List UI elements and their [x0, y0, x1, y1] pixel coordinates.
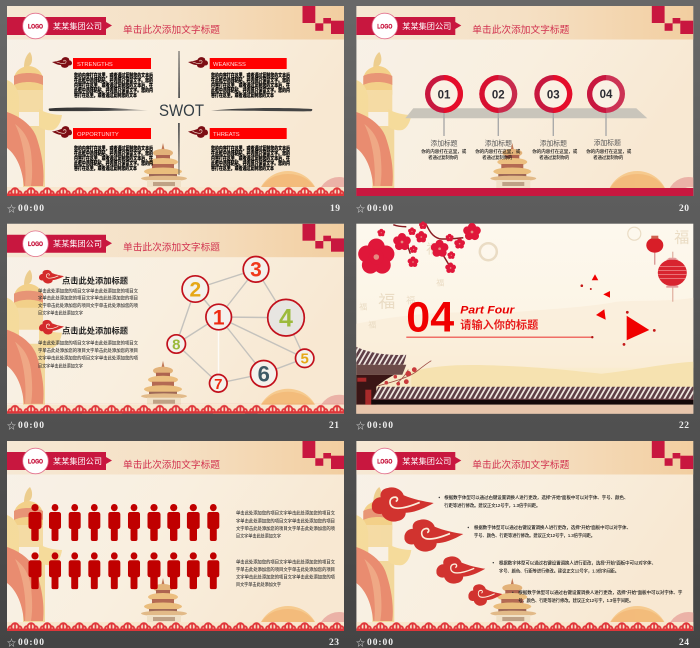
slide 21 header ribbon: [7, 224, 344, 256]
cloud 2: [404, 519, 463, 552]
threats block: THREATS: [213, 132, 240, 138]
step 02: [475, 75, 521, 161]
step 04: 者通过复制你的: [593, 154, 624, 161]
text block upper: 字单击此处添加您的项目文字单击此处添加您的项目: [236, 518, 335, 524]
footer row 1: 20: [679, 204, 689, 214]
opportunity block: 内容打在这里，或者通过复制您的文本后，在: [74, 155, 153, 162]
slide 24 background art: [356, 441, 700, 648]
step 04: [586, 75, 632, 161]
step 03: 你的内容打在这里，或: [532, 148, 578, 155]
step 02: 者通过复制你的: [482, 154, 513, 161]
step 01: 者通过复制你的: [428, 154, 459, 161]
bullet text 1: 行距等进行修改。建议正文12号字，1.3倍字间距。: [444, 502, 540, 509]
slide 20 company name: 某某集团公司: [402, 21, 451, 31]
cloud 1: [372, 487, 434, 522]
bullet text 1: [439, 494, 628, 509]
footer row 3: [7, 638, 689, 648]
footer row 3: ☆: [356, 638, 365, 648]
threats block: 此框中选择粘贴，并选择只保留文字。您的内: [211, 160, 290, 167]
section title: 请输入你的标题: [460, 318, 538, 332]
slide 23 company name: 某某集团公司: [53, 456, 102, 466]
strengths block: 您的内容打在这里，或者通过复制您的文本后: [74, 72, 153, 79]
node 1: [206, 304, 232, 330]
decorative border: [7, 621, 344, 631]
slide 23 background art: [7, 441, 360, 648]
step 03: 者通过复制你的: [539, 154, 570, 161]
decorative border: [7, 186, 344, 196]
slide 20 background art: [356, 6, 700, 233]
weakness block: 此框中选择粘贴，并选择只保留文字。您的内: [211, 87, 290, 94]
pale calligraphy motifs: 福: [359, 303, 367, 312]
step 04: 添加标题: [594, 138, 621, 147]
node 5: 5: [301, 351, 309, 368]
step 02: 添加标题: [485, 138, 512, 148]
slide 19 header ribbon: [7, 6, 344, 39]
bullet text 4: [512, 589, 683, 604]
node 5: [296, 349, 314, 368]
footer row 2: [7, 421, 689, 431]
text block lower: 目文字单击此处添加文字: [236, 581, 281, 588]
triangles: [580, 274, 656, 346]
footer row 1: [7, 204, 689, 214]
slide 21 background art: [7, 224, 360, 451]
step 01: [421, 75, 467, 161]
footer row 3: 24: [679, 638, 689, 648]
decorative border: [7, 404, 344, 414]
roof and pavilion: [356, 347, 693, 414]
cloud 3: [436, 556, 485, 584]
people icon row 1: [28, 504, 219, 541]
step 04: 04: [600, 89, 613, 101]
panel: slide 19 SWOT: [7, 6, 360, 233]
pale calligraphy motifs: 福: [368, 321, 376, 330]
panel: slide 20 timeline: [356, 6, 700, 233]
text block upper: 目文字单击此处添加文字: [236, 532, 281, 540]
grey band: [405, 108, 647, 118]
text block lower: 字单击此处添加您的项目文字单击此处添加您的项目: [236, 566, 335, 573]
step 02: 你的内容打在这里，或: [475, 148, 521, 155]
bottom bar: [356, 188, 693, 196]
strengths block: 在此框中选择粘贴，并选择只保留文字。您的: [74, 77, 153, 84]
slide 19 title: 单击此次添加文字标题: [123, 24, 220, 36]
pale calligraphy motifs: 福: [436, 279, 444, 288]
pale calligraphy motifs: 福: [378, 293, 395, 312]
Part Four: Part Four: [460, 305, 515, 317]
threats block: [188, 126, 290, 172]
slide 22 background: [356, 224, 693, 414]
footer row 1: 19: [330, 204, 340, 214]
threats block: 内容打在这里，或者通过复制您的文本后，在: [211, 155, 290, 162]
panel: slide 21 network: [7, 224, 360, 451]
text block 2: 单击此处添加您的项目文字单击此处添加您的项目文: [38, 340, 138, 347]
cloud 4: [468, 584, 502, 606]
footer row 1: ☆: [7, 204, 16, 214]
ink cross: [49, 51, 312, 175]
step 03: 添加标题: [540, 138, 567, 148]
footer row 1: 00:00: [367, 204, 393, 214]
panel: slide 24 clouds: [356, 441, 700, 648]
slide 24 company name: 某某集团公司: [402, 456, 451, 466]
lanterns: [646, 236, 687, 302]
strengths block: STRENGTHS: [77, 62, 113, 68]
text block 2: 点击此处添加标题: [62, 326, 128, 336]
slide 21 title: 单击此次添加文字标题: [123, 242, 220, 254]
underline: [406, 336, 594, 338]
text block 1: 点击此处添加标题: [62, 276, 128, 286]
strengths block: 此框中选择粘贴，并选择只保留文字。您的内: [74, 87, 153, 94]
node 4: 4: [279, 305, 293, 333]
decorative border: [356, 621, 693, 631]
people icon row 2: [28, 552, 219, 589]
text block upper: 文字单击此处添加您的项目文字单击此处添加您的项: [236, 525, 335, 532]
bullet text 1: 根据数字体型可以通过右键设置调换人进行更改，选择“开始”面板中可以对字体、字号、颜色、: [444, 494, 628, 501]
opportunity block: 容打在这里，或者通过复制您的文本: [74, 165, 137, 172]
footer row 1: ☆: [356, 204, 365, 214]
text block upper: 单击此处添加您的项目文字单击此处添加您的项目文: [236, 510, 335, 516]
plum blossom branch: [358, 221, 481, 274]
slide 24 title: 单击此次添加文字标题: [472, 459, 570, 471]
footer row 3: ☆: [7, 638, 16, 648]
threats block: 在此框中选择粘贴，并选择只保留文字。您的: [211, 150, 290, 157]
strengths block: 内容打在这里，或者通过复制您的文本后，在: [74, 82, 153, 89]
node 4: [268, 299, 304, 336]
weakness block: 容打在这里，或者通过复制您的文本: [211, 92, 274, 99]
step 03: 03: [547, 90, 560, 102]
step 01: 你的内容打在这里，或: [421, 148, 467, 155]
footer row 2: ☆: [7, 421, 16, 431]
slide 20 header ribbon: [356, 6, 693, 39]
footer row 2: 21: [329, 421, 339, 431]
bullet text 2: 根据数字体型可以通过右键设置调换人进行更改，选择“开始”面板中可以对字体、: [474, 524, 631, 531]
slide 24 header ribbon: [356, 441, 693, 474]
section number 04: 04: [406, 294, 454, 342]
opportunity block: 此框中选择粘贴，并选择只保留文字。您的内: [74, 160, 153, 167]
strengths block: [52, 57, 153, 99]
footer row 3: 23: [329, 638, 339, 648]
weakness block: 在此框中选择粘贴，并选择只保留文字。您的: [211, 77, 290, 84]
SWOT heading: SWOT: [159, 101, 204, 120]
slide 19 background art: [7, 6, 360, 233]
bullet text 3: 字号、颜色、行距等进行修改。建议正文12号字，1.3倍字间距。: [499, 568, 619, 574]
weakness block: 您的内容打在这里，或者通过复制您的文本后: [211, 72, 290, 79]
panel: slide 22 section cover: [356, 221, 693, 414]
footer row 2: 00:00: [18, 421, 44, 431]
pale calligraphy motifs: [359, 227, 689, 330]
bullet text 3: 根据数字体型可以通过右键设置调换人进行更改，选择“开始”面板中可以对字体、: [499, 560, 656, 566]
text block 1: 文字单击此处添加您的项目文字单击此处添加您的项: [38, 302, 138, 309]
step 03: [532, 75, 578, 161]
text block 1: [38, 270, 138, 317]
footer row 2: 00:00: [367, 421, 393, 431]
bullet text 4: 号、颜色、行距等进行修改。建议正文12号字，1.3倍字间距。: [518, 597, 633, 604]
pale calligraphy motifs: 福: [406, 295, 415, 306]
node 7: [210, 374, 227, 393]
text block 2: 目文字单击此处添加文字: [38, 363, 83, 370]
pale calligraphy motifs: 福: [674, 230, 689, 247]
weakness block: [188, 57, 290, 99]
opportunity block: [52, 126, 153, 172]
text block lower: 单击此处添加您的项目文字单击此处添加您的项目文: [236, 558, 335, 566]
step 01: 添加标题: [430, 138, 458, 148]
pale mountains: [356, 298, 693, 390]
text block 1: 单击此处添加您的项目文字单击此处添加您的项目文: [38, 288, 138, 295]
bullet text 2: [468, 524, 631, 539]
network diagram: [167, 256, 314, 393]
threats block: 容打在这里，或者通过复制您的文本: [211, 165, 274, 172]
text block 2: 文字单击此处添加您的项目文字单击此处添加您的项: [38, 355, 138, 362]
node 1: 1: [213, 306, 225, 330]
opportunity block: OPPORTUNITY: [77, 132, 119, 138]
pale calligraphy motifs: 福: [426, 242, 439, 257]
weakness block: WEAKNESS: [213, 62, 246, 68]
text block lower: [236, 558, 335, 588]
node 7: 7: [214, 376, 222, 393]
footer row 3: 00:00: [367, 638, 393, 648]
node 8: [167, 335, 186, 354]
text block 2: [38, 320, 138, 370]
footer row 2: ☆: [356, 421, 365, 431]
node 2: [182, 276, 208, 302]
slide 23 header ribbon: [7, 441, 344, 474]
node 6: [251, 360, 277, 387]
text block 2: 字单击此处添加您的项目文字单击此处添加您的项目: [38, 347, 138, 354]
slide 23 title: 单击此次添加文字标题: [123, 459, 220, 471]
text block 1: 字单击此处添加您的项目文字单击此处添加您的项目: [38, 295, 138, 302]
node 3: [243, 256, 269, 282]
bullet text 2: 字号、颜色、行距等进行修改。建议正文12号字，1.3倍字间距。: [474, 532, 595, 539]
node 3: 3: [250, 259, 262, 282]
footer row 3: 00:00: [18, 638, 44, 648]
slide 21 company name: 某某集团公司: [53, 239, 102, 249]
node 2: 2: [189, 278, 201, 302]
bullet text 3: [493, 560, 656, 574]
weakness block: 内容打在这里，或者通过复制您的文本后，在: [211, 82, 290, 89]
opportunity block: 在此框中选择粘贴，并选择只保留文字。您的: [74, 150, 153, 157]
opportunity block: 您的内容打在这里，或者通过复制您的文本后: [74, 145, 153, 152]
footer row 1: 00:00: [18, 204, 44, 214]
strengths block: 容打在这里，或者通过复制您的文本: [74, 92, 137, 99]
footer row 2: 22: [679, 421, 689, 431]
step 02: 02: [492, 90, 505, 102]
slide 20 title: 单击此次添加文字标题: [472, 24, 570, 36]
text block lower: 文字单击此处添加您的项目文字单击此处添加您的项: [236, 574, 335, 580]
threats block: 您的内容打在这里，或者通过复制您的文本后: [211, 145, 290, 152]
node 8: 8: [172, 336, 180, 354]
step 04: 你的内容打在这里，或: [586, 148, 632, 155]
slide 19 company name: 某某集团公司: [53, 21, 102, 31]
connecting lines: [176, 269, 305, 383]
text block upper: [236, 510, 335, 540]
node 6: 6: [258, 362, 270, 387]
panel: slide 23 people: [7, 441, 360, 648]
text block 1: 目文字单击此处添加文字: [38, 310, 83, 317]
bullet text 4: 根据数字体型可以通过右键设置调换人进行更改，选择“开始”面板中可以对字体、字: [518, 589, 683, 596]
step 01: 01: [438, 90, 451, 102]
